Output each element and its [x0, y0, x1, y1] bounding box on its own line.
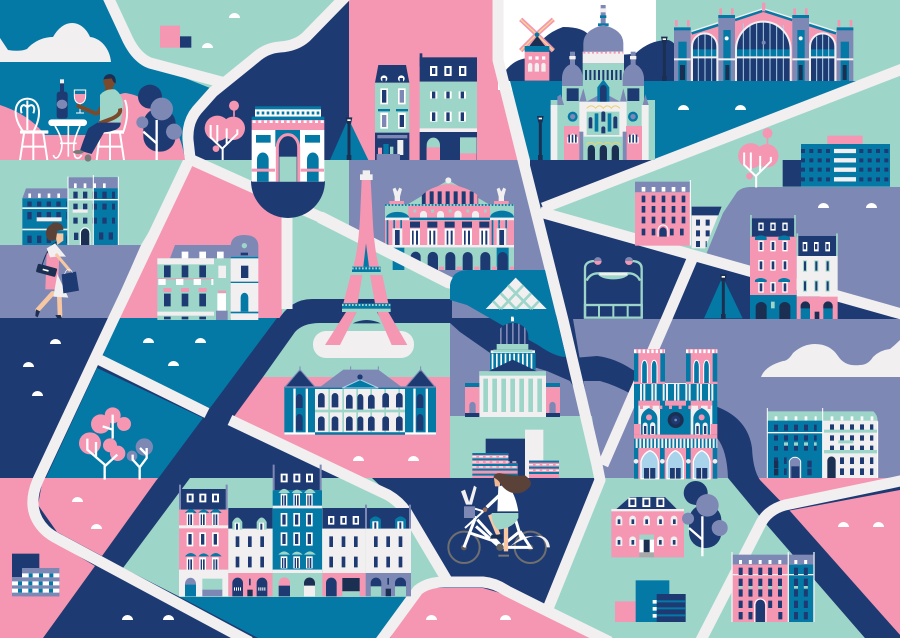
- street lamp with teal light: top: [330, 117, 368, 160]
- metro entrance: [585, 257, 642, 318]
- louvre courtyard: [450, 270, 566, 357]
- street lamp with teal light: lower: [704, 274, 743, 319]
- tree: navy and periwinkle, cafe: [136, 85, 182, 160]
- street lamp: montmartre left: [537, 116, 544, 160]
- mint block: stacked buildings: [472, 430, 559, 478]
- building: mint townhouse: [375, 65, 409, 160]
- pink and navy block: [160, 26, 191, 48]
- cafe scene: [16, 74, 127, 162]
- haussmann building: white and mint with dome: [157, 235, 258, 320]
- palais garnier opera: [385, 177, 514, 270]
- office block top right: [783, 136, 890, 187]
- townhouse 5: white with periwinkle ground: [366, 505, 411, 596]
- street lamp: montmartre right: [661, 37, 668, 81]
- cloud: right: [761, 340, 900, 377]
- wine bottle: [57, 79, 68, 119]
- teal office block: bottom: [615, 580, 686, 622]
- woman shopping: [35, 223, 79, 319]
- arc de triomphe: [252, 106, 324, 182]
- road segment over opera base: [320, 217, 450, 283]
- eiffel tower: [325, 170, 407, 345]
- notre dame cathedral: [634, 349, 717, 479]
- white pill under eiffel tower: [313, 331, 414, 358]
- row of townhouses: [179, 465, 411, 596]
- tree: pink near arc: [205, 101, 245, 160]
- pantheon: [465, 318, 560, 417]
- tree: pink near office: [738, 128, 778, 187]
- townhouse 1: pink: [179, 485, 228, 596]
- pink mansion: [611, 497, 684, 557]
- townhouse 3: teal: [273, 465, 322, 596]
- townhouse 2: white: [228, 508, 273, 596]
- table: [48, 119, 87, 158]
- louvre pyramid: [486, 278, 547, 321]
- building: mint with navy roof: [420, 53, 477, 160]
- seated man: [73, 74, 123, 162]
- wine glass: [74, 90, 86, 113]
- pink and teal apartment: bottom right: [732, 552, 814, 622]
- trees on teal: [79, 407, 153, 480]
- right chair: [97, 100, 127, 160]
- left chair: [16, 99, 48, 160]
- teal and white apartment buildings: right: [767, 408, 878, 478]
- montmartre windmill: [521, 19, 553, 81]
- pink hill behind cafe: [0, 93, 185, 160]
- navy dome under arc: [251, 181, 325, 218]
- pink townhouse and brick townhouse: [750, 215, 838, 319]
- townhouse 4: white: [322, 508, 366, 596]
- sacre coeur basilica: [551, 5, 655, 160]
- small apartment block: bottom left: [12, 554, 59, 596]
- cloud: top left: [0, 23, 111, 62]
- left area apartment buildings: [22, 175, 118, 245]
- palais du luxembourg: [284, 366, 436, 435]
- tree: navy and periwinkle, mansion: [682, 481, 728, 556]
- cyclist with baguette: [448, 473, 550, 563]
- pink grid building: [635, 180, 722, 248]
- gare du nord station: [674, 3, 853, 81]
